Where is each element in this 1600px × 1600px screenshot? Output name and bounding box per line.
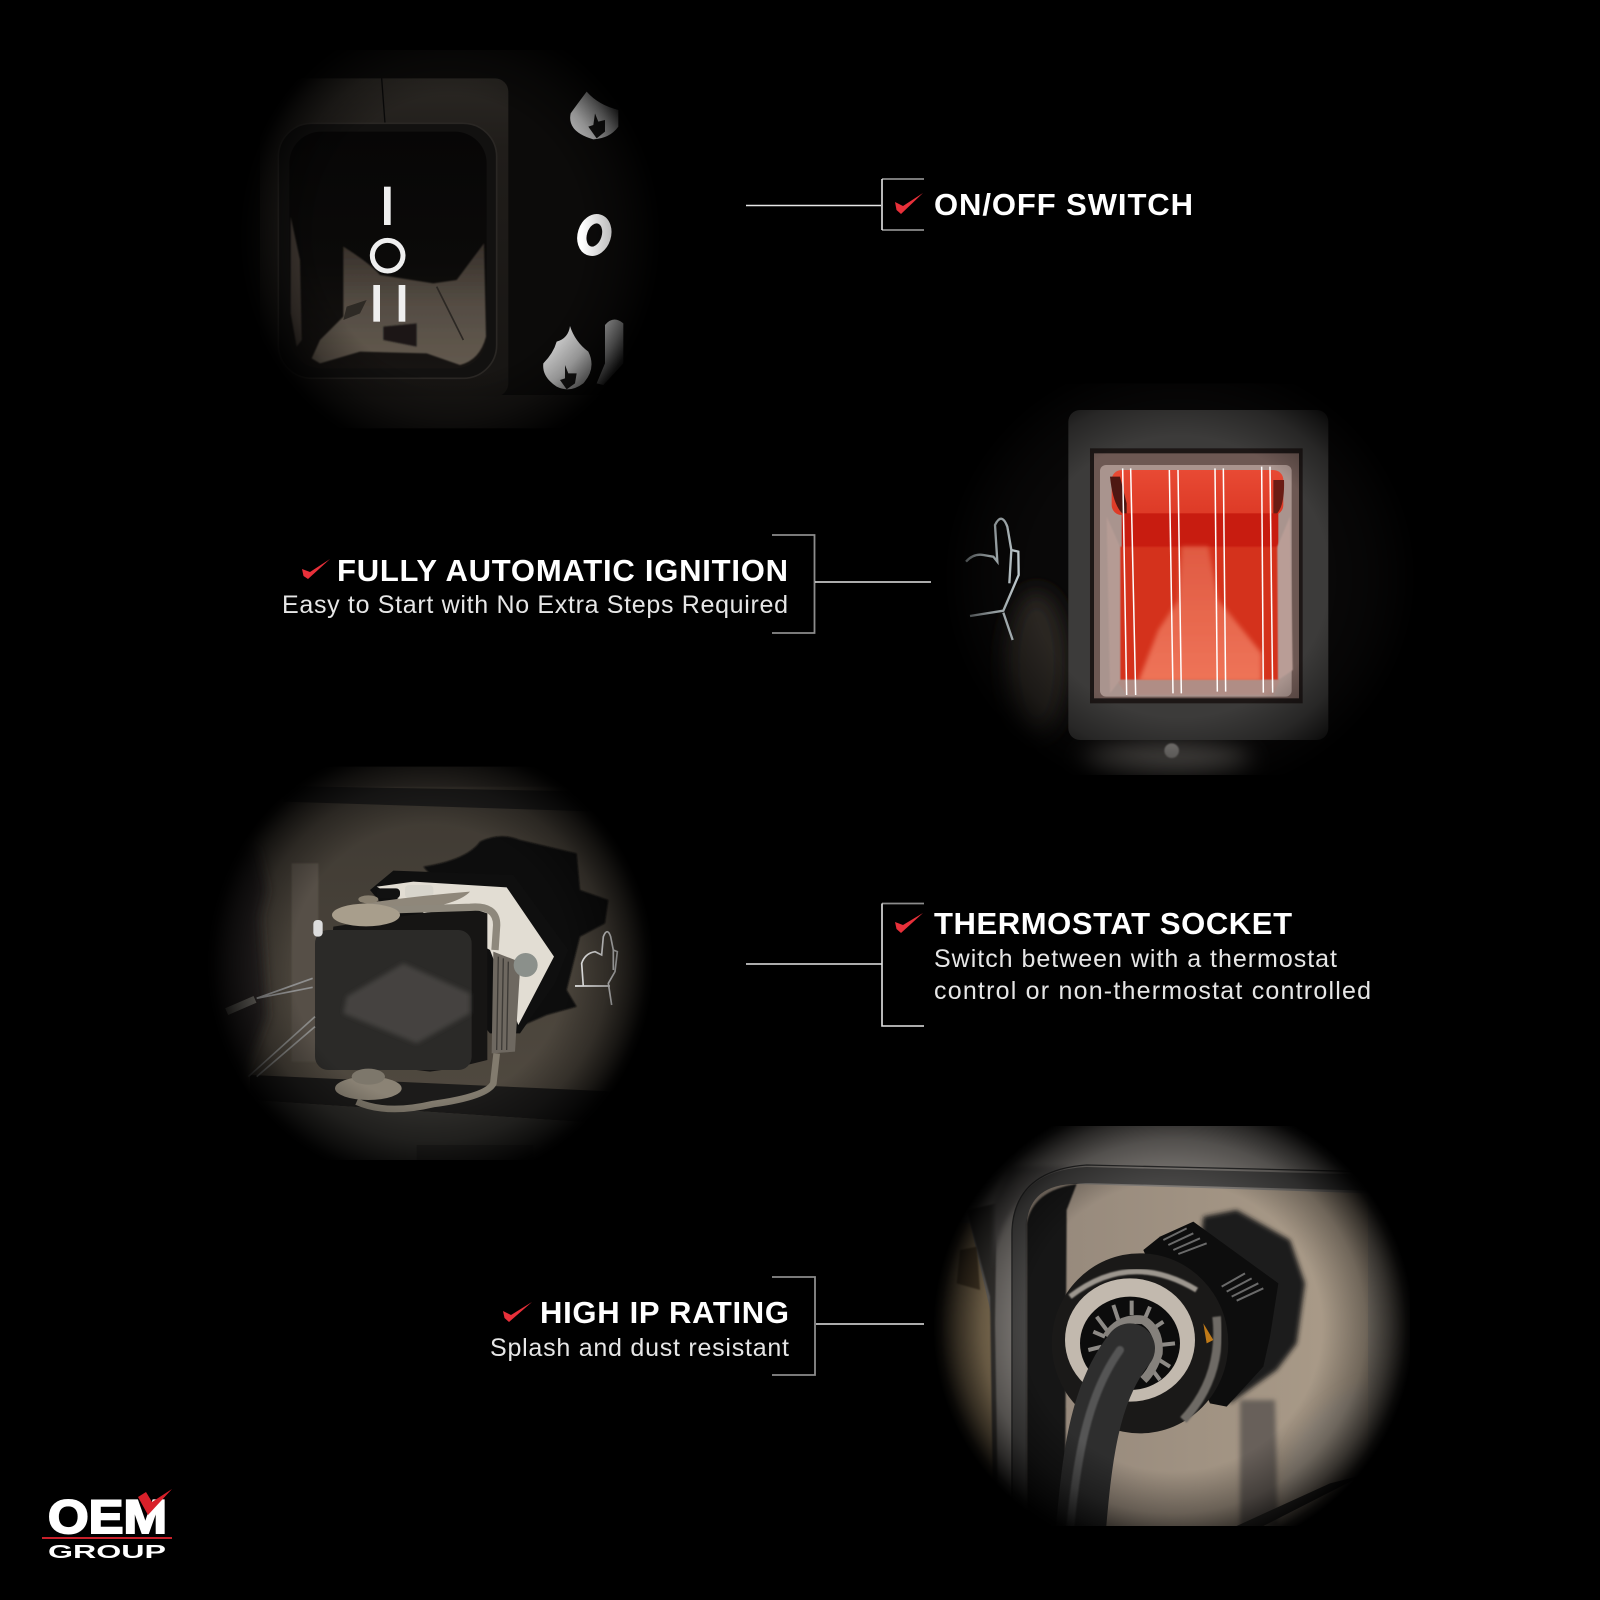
red rocker — [1107, 470, 1293, 695]
panel: cable gland photo — [930, 1126, 1420, 1540]
icon: thermometer — [597, 320, 623, 385]
reflected white lines — [1123, 467, 1273, 695]
bracket — [882, 904, 924, 1026]
description: Switch between with a thermostat — [934, 945, 1337, 973]
panel: thermostat socket photo — [222, 766, 644, 1160]
infographic canvas — [42, 61, 1408, 1558]
chrome dome — [1052, 1253, 1228, 1433]
vertical reflection — [1240, 1400, 1278, 1527]
description: Easy to Start with No Extra Steps Required — [282, 591, 788, 619]
icon: zero position — [578, 215, 611, 255]
logo wordmark: OEM — [48, 1490, 167, 1543]
metal bracket — [332, 892, 497, 1109]
icon: red check — [302, 559, 330, 579]
icon: high flame — [543, 326, 592, 389]
gland shadow — [1197, 1210, 1305, 1403]
gland teeth — [1088, 1301, 1175, 1380]
beige panel — [1027, 1184, 1368, 1527]
icon: low flame — [570, 92, 618, 139]
black rubber cap — [315, 907, 487, 1072]
screw — [514, 953, 538, 977]
icon: red check — [895, 193, 923, 214]
icon: hand pointer — [966, 519, 1019, 640]
logo: OEM Group — [42, 1489, 172, 1562]
bracket — [882, 179, 924, 230]
switch bezel — [1068, 410, 1328, 740]
logo check mark — [138, 1489, 172, 1515]
heading: HIGH IP RATING — [540, 1295, 789, 1330]
description: control or non-thermostat controlled — [934, 977, 1371, 1005]
rocker face — [289, 132, 487, 368]
heading: THERMOSTAT SOCKET — [934, 906, 1292, 941]
leader line — [746, 963, 882, 965]
glossy shadow — [423, 836, 608, 1027]
icon: hand pointer — [575, 932, 617, 1005]
icon: red check — [503, 1302, 532, 1322]
description — [934, 945, 1371, 1005]
panel: on/off rocker switch photo — [260, 61, 624, 428]
enclosure frame — [1019, 1175, 1367, 1527]
cable collar — [1107, 1320, 1158, 1380]
logo rule — [42, 1537, 172, 1539]
callout: fully automatic ignition — [282, 535, 931, 633]
pins — [377, 885, 433, 898]
panel: lit red ignition switch photo — [965, 410, 1336, 775]
icon: red check — [895, 913, 923, 933]
leader line — [816, 1323, 924, 1325]
bracket — [772, 1277, 815, 1375]
power cable — [1070, 1348, 1130, 1540]
bracket — [772, 535, 814, 633]
latch lever — [492, 952, 520, 1053]
leader line — [746, 204, 881, 206]
heading: FULLY AUTOMATIC IGNITION — [337, 553, 788, 588]
socket gasket — [370, 870, 528, 1034]
white base plate — [377, 882, 554, 1025]
description: Splash and dust resistant — [490, 1334, 789, 1362]
heading: ON/OFF SWITCH — [934, 187, 1193, 222]
callout: thermostat socket — [746, 904, 1371, 1026]
callout: high IP rating — [490, 1277, 924, 1375]
hex nut — [1143, 1222, 1278, 1407]
callout: on/off switch — [746, 179, 1193, 230]
frame shadow — [1027, 1184, 1077, 1527]
logo subtitle: GROUP — [48, 1542, 166, 1562]
wires — [227, 978, 315, 1077]
leader line — [815, 581, 931, 583]
rocker symbols — [372, 187, 405, 322]
